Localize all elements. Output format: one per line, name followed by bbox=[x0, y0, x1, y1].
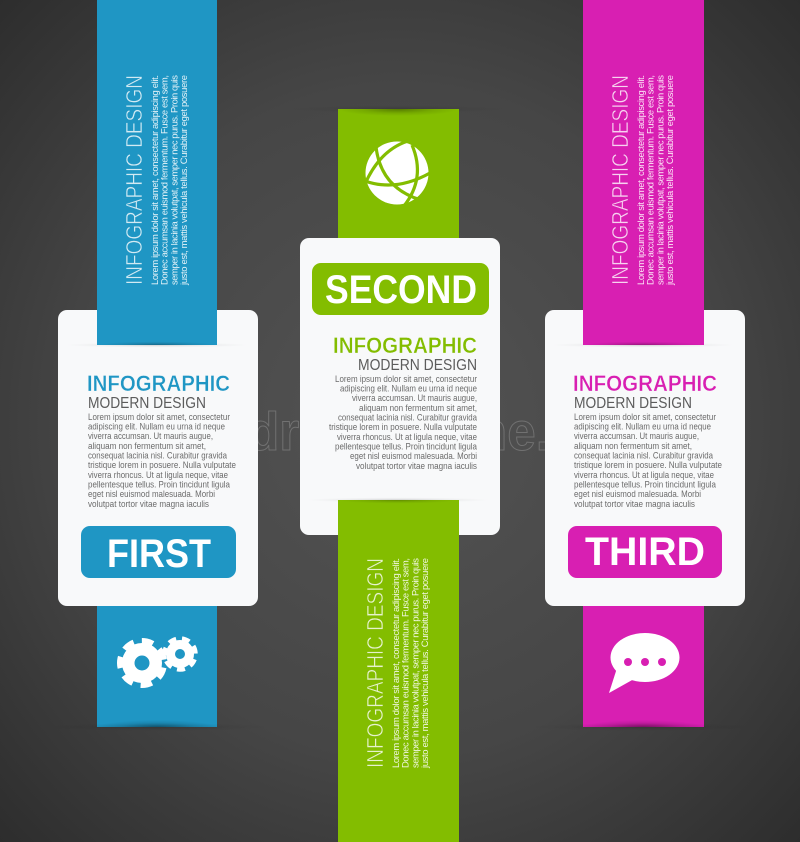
vertical text: first ribbon: semper in lacinia volutpat, semper nec purus. Proin quis bbox=[168, 75, 180, 285]
watermark: dreamstime. bbox=[248, 402, 550, 462]
ribbon: first (blue) bbox=[42, 0, 272, 734]
body text: pellentesque tellus. Proin tincidunt ligula bbox=[335, 442, 478, 452]
vertical text: third ribbon: Donec accumsan euismod fermentum. Fusce est sem, bbox=[644, 75, 656, 285]
vertical text: second ribbon: semper in lacinia volutpat, semper nec purus. Proin quis bbox=[410, 558, 420, 768]
body text: eget nisl euismod malesuada. Morbi bbox=[88, 489, 215, 500]
vertical text: first ribbon: Donec accumsan euismod fermentum. Fusce est sem, bbox=[158, 75, 170, 285]
body text: viverra rhoncus. Ut at ligula neque, vitae bbox=[88, 470, 228, 481]
vertical text: second ribbon: Lorem ipsum dolor sit amet, consectetur adipiscing elit. bbox=[390, 558, 401, 768]
body text: pellentesque tellus. Proin tincidunt ligula bbox=[574, 480, 717, 490]
body text: consequat lacinia nisl. Curabitur gravida bbox=[574, 450, 714, 462]
heading: INFOGRAPHIC bbox=[87, 371, 230, 396]
body text: volutpat tortor vitae magna iaculis bbox=[356, 461, 477, 472]
body text: aliquam non fermentum sit amet, bbox=[574, 441, 692, 452]
body text: volutpat tortor vitae magna iaculis bbox=[88, 499, 209, 510]
body text: viverra rhoncus. Ut at ligula neque, vitae bbox=[337, 432, 477, 443]
lower ribbon bbox=[338, 496, 459, 842]
button: FIRST bbox=[81, 526, 236, 578]
body text: tristique lorem in posuere. Nulla vulputate bbox=[329, 422, 477, 433]
vertical text: second ribbon: Donec accumsan euismod fermentum. Fusce est sem, bbox=[400, 558, 410, 768]
body text: Lorem ipsum dolor sit amet, consectetur bbox=[335, 374, 478, 385]
body text: viverra accumsan. Ut mauris augue, bbox=[574, 431, 699, 442]
card bbox=[545, 310, 745, 606]
body text: viverra accumsan. Ut mauris augue, bbox=[88, 431, 213, 442]
vertical text: second ribbon: justo est, mattis vehicula tellus. Curabitur eget posuere bbox=[419, 558, 430, 769]
icon: gears bbox=[116, 634, 200, 689]
body text: adipiscing elit. Nullam eu urna id neque bbox=[88, 422, 225, 432]
body text: tristique lorem in posuere. Nulla vulputate bbox=[574, 460, 722, 471]
body text: aliquam non fermentum sit amet, bbox=[88, 441, 206, 452]
vertical text: second ribbon bbox=[362, 558, 430, 769]
ribbon overlap bbox=[583, 310, 704, 345]
panel: third bbox=[545, 310, 745, 606]
vertical text: third ribbon: justo est, mattis vehicula tellus. Curabitur eget posuere bbox=[664, 75, 675, 286]
body text: eget nisl euismod malesuada. Morbi bbox=[574, 489, 701, 500]
vertical text: third ribbon bbox=[607, 75, 675, 286]
ribbon: second (green) bbox=[338, 108, 459, 238]
body text: consequat lacinia nisl. Curabitur gravida bbox=[338, 412, 478, 424]
heading: INFOGRAPHIC bbox=[573, 371, 717, 396]
body text: Lorem ipsum dolor sit amet, consectetur bbox=[88, 412, 231, 423]
subheading: MODERN DESIGN bbox=[88, 395, 206, 412]
vertical text: third ribbon: INFOGRAPHIC DESIGN bbox=[607, 75, 633, 285]
button: FIRST: FIRST bbox=[107, 532, 211, 576]
heading: INFOGRAPHIC bbox=[333, 333, 477, 358]
body text: tristique lorem in posuere. Nulla vulputate bbox=[88, 460, 236, 471]
vertical text: first ribbon: INFOGRAPHIC DESIGN bbox=[121, 75, 147, 285]
body text: consequat lacinia nisl. Curabitur gravida bbox=[88, 450, 228, 462]
vertical text: third ribbon: semper in lacinia volutpat, semper nec purus. Proin quis bbox=[654, 75, 666, 285]
card bbox=[300, 238, 500, 535]
panel: second bbox=[300, 238, 500, 842]
body text: Lorem ipsum dolor sit amet, consectetur bbox=[574, 412, 717, 423]
vertical text: second ribbon: INFOGRAPHIC DESIGN bbox=[362, 558, 388, 768]
body text: adipiscing elit. Nullam eu urna id neque bbox=[574, 422, 711, 432]
subheading: MODERN DESIGN bbox=[358, 357, 477, 374]
ribbon: third (magenta) bbox=[528, 0, 758, 734]
body text bbox=[88, 412, 236, 510]
body text: eget nisl euismod malesuada. Morbi bbox=[350, 451, 477, 462]
icon: globe bbox=[365, 141, 430, 206]
icon: speech bubble bbox=[609, 633, 680, 693]
vertical text: first ribbon: Lorem ipsum dolor sit amet, consectetur adipiscing elit. bbox=[149, 75, 160, 285]
subheading: MODERN DESIGN bbox=[574, 395, 692, 412]
body text: volutpat tortor vitae magna iaculis bbox=[574, 499, 695, 510]
body text: pellentesque tellus. Proin tincidunt ligula bbox=[88, 480, 231, 490]
vertical text: first ribbon: justo est, mattis vehicula tellus. Curabitur eget posuere bbox=[178, 75, 189, 286]
body text bbox=[329, 374, 478, 472]
body text: adipiscing elit. Nullam eu urna id neque bbox=[340, 384, 477, 394]
button: THIRD bbox=[568, 526, 722, 578]
panel: first bbox=[58, 310, 258, 606]
body text: aliquam non fermentum sit amet, bbox=[359, 403, 477, 414]
vertical text: first ribbon bbox=[121, 75, 189, 286]
button: SECOND: SECOND bbox=[325, 268, 477, 312]
body text: viverra accumsan. Ut mauris augue, bbox=[352, 393, 477, 404]
card bbox=[58, 310, 258, 606]
vertical text: third ribbon: Lorem ipsum dolor sit amet, consectetur adipiscing elit. bbox=[635, 75, 646, 285]
button: THIRD: THIRD bbox=[585, 530, 705, 574]
ribbon overlap bbox=[97, 310, 217, 345]
body text bbox=[574, 412, 722, 510]
body text: viverra rhoncus. Ut at ligula neque, vitae bbox=[574, 470, 714, 481]
